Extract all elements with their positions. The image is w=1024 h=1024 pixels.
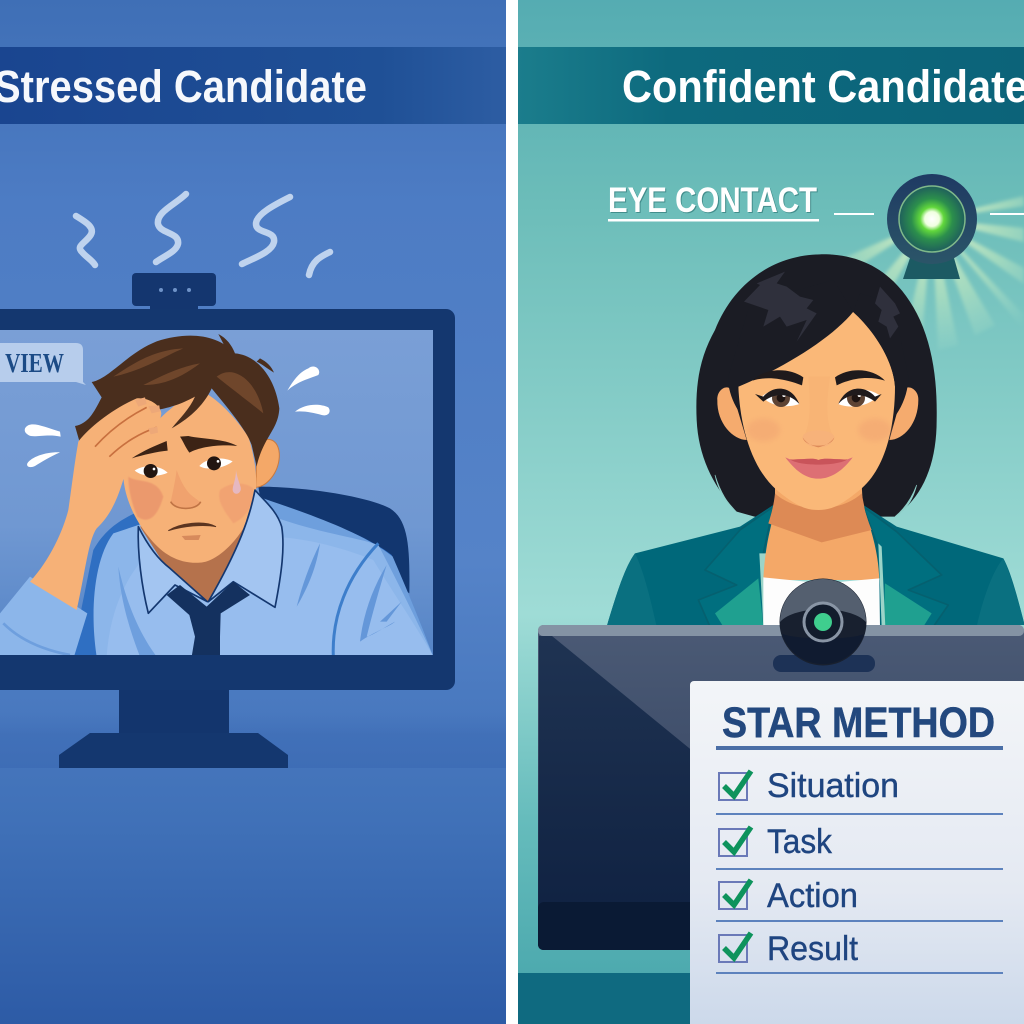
icon: light rays from webcam (835, 196, 1024, 350)
blouse (763, 577, 880, 627)
checklist item: situation (716, 767, 1003, 815)
icon: webcam on laptop (773, 578, 875, 672)
collar (138, 490, 283, 613)
stress marks (25, 367, 330, 467)
checklist item: task (716, 823, 1003, 870)
illustration: stressed man (0, 334, 433, 657)
shirt torso (72, 493, 433, 657)
icon: webcam on monitor (132, 273, 216, 310)
heading band: stressed candidate (0, 47, 506, 124)
checklist item: action (716, 877, 1003, 922)
illustration: confident woman (607, 254, 1024, 627)
icon: stress squiggles (76, 194, 330, 275)
hair (75, 334, 279, 467)
hair tip slivers (715, 475, 917, 517)
eyebrows (132, 436, 237, 458)
heading band: stressed candidate: Stressed Candidate (0, 61, 367, 112)
forearm and hand (30, 397, 161, 610)
sweat drop (233, 470, 241, 494)
monitor frame (0, 309, 455, 690)
eyes (755, 389, 882, 407)
eyes (135, 458, 233, 476)
desk shadow (0, 712, 506, 768)
eyebrows (753, 370, 803, 385)
face (123, 390, 256, 563)
blazer (607, 505, 1024, 627)
checklist item: task: Task (767, 823, 833, 861)
hair side locks and fringe (729, 312, 908, 415)
cheeks (747, 419, 780, 441)
panel: star method checklist (690, 681, 1024, 1024)
ear (256, 439, 279, 487)
necktie (167, 582, 250, 657)
panel: confident candidate (518, 0, 1024, 1024)
back hair (696, 254, 937, 520)
hair highlights (744, 272, 900, 342)
neck (763, 483, 879, 580)
sleeve (0, 577, 87, 657)
monitor stand (59, 688, 288, 768)
icon: glowing webcam (887, 174, 977, 279)
neck (140, 526, 244, 601)
heading band: confident candidate (518, 47, 1024, 124)
label: eye contact: EYE CONTACT (608, 181, 817, 220)
panel: stressed candidate (0, 0, 506, 1024)
ears (717, 387, 747, 440)
right panel desk band (518, 973, 1024, 1024)
checklist item: result (716, 930, 1003, 974)
face (738, 312, 895, 510)
nose (803, 377, 834, 447)
lapels (698, 507, 773, 627)
video call screen (0, 330, 433, 657)
checklist item: situation: Situation (767, 767, 899, 805)
monitor screen glare (538, 636, 700, 950)
laptop monitor (538, 625, 1024, 950)
checklist item: result: Result (767, 930, 859, 968)
office chair (258, 487, 409, 593)
checklist item: action: Action (767, 877, 858, 915)
lips (785, 457, 853, 479)
